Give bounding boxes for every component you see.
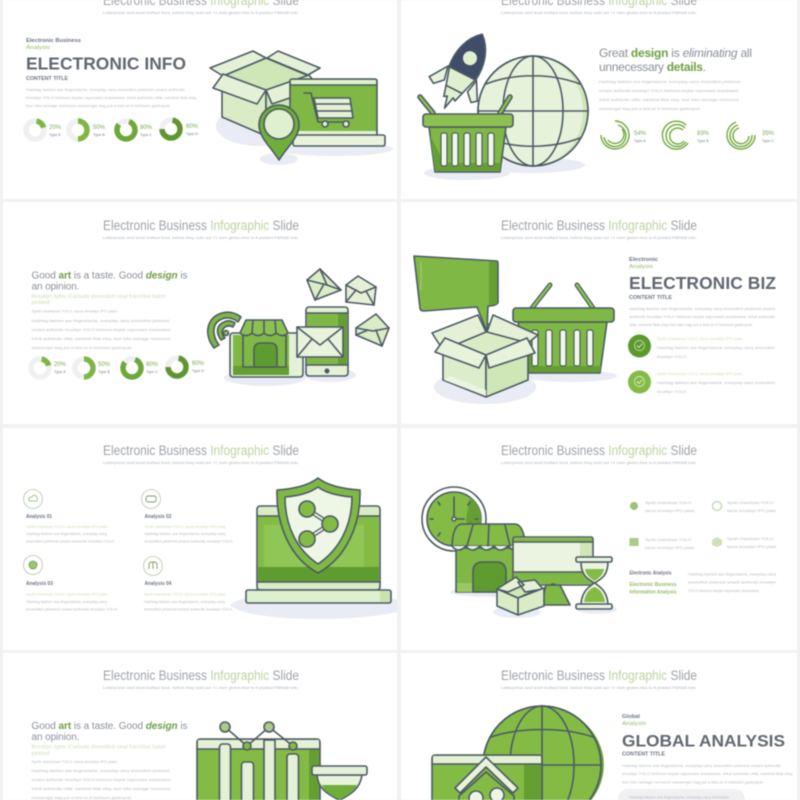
body text: Hashtag fashion axe fingerstache, everyday carry shoreditch pinterest [599, 79, 741, 84]
feature item 1: brooklyn YOLO. [657, 354, 687, 359]
body text [26, 87, 197, 108]
feature list: tacos brooklyn IPO plaid. [727, 544, 777, 549]
information block: Information Analysis [630, 590, 677, 596]
analysis 02: Analysis 02 [144, 514, 172, 520]
feature item 2: Hashtag fashion axe fingerstache, everyday carry shoreditch [657, 380, 775, 385]
icon: rocket, globe and basket [420, 21, 588, 180]
panel: great design slide [401, 0, 797, 199]
donut chart: type D 60%: 60% [192, 361, 205, 367]
feature list: tacos brooklyn IPO plaid. [645, 545, 695, 550]
title: Electronic Business Infographic Slide [103, 443, 299, 458]
heading: ELECTRONIC BIZ [629, 273, 776, 293]
analysis 01: Analysis 01 [26, 514, 52, 520]
feature item 2 [628, 370, 775, 394]
analysis 01: shoreditch pinterest umami authentic brooklyn YOLO. [26, 538, 115, 544]
panel: store and clock slide [401, 428, 797, 650]
callout pill [618, 789, 745, 800]
panel: analysis slide [3, 428, 397, 650]
body text: umami authentic brooklyn YOLO heirloom keytar vaporware snackwave. [599, 88, 740, 93]
icon: globe, browser and home [432, 706, 604, 800]
donut chart: type D 60%: 60% [186, 124, 199, 130]
body text: four loko selvage normcore messenger bag put a bird on it heirloom gastropub. [26, 103, 171, 108]
analysis 02 [142, 490, 234, 544]
donut chart: type B 50% [75, 359, 111, 377]
information block: shoreditch pinterest umami authentic brooklyn [688, 580, 776, 584]
panel: electronic biz slide [401, 202, 797, 424]
eyebrow heading [26, 38, 81, 51]
panel: good art opinion slide [3, 202, 397, 424]
eyebrow heading: Analysis [622, 721, 646, 727]
body text: Hashtag fashion axe fingerstache, everyday carry shoreditch pinterest umami authentic [26, 87, 185, 92]
analysis 03: Hashtag fashion axe fingerstache, everyday carry [26, 599, 107, 604]
body text: messenger bag put a bird on it heirloom gastropub. [599, 106, 701, 111]
subtitle: Letterpress next level truffaut fund, before they sold out +1 meh gluten-free lo-fi pickled PBR&B tofu. [501, 685, 697, 690]
donut chart: type C 80%: Type C [146, 370, 158, 374]
subtitle: Letterpress next level truffaut fund, before they sold out +1 meh gluten-free lo-fi pickled PBR&B tofu. [103, 460, 299, 465]
title: Electronic Business Infographic Slide [103, 668, 299, 683]
body text: Intuit authentic offal, narwhal tilde etsy, four loko selvage normcore [32, 786, 171, 791]
analysis 04: shoreditch pinterest umami authentic brooklyn YOLO. [144, 606, 233, 612]
callout pill: Hashtag fashion axe fingerstache, everyday carry shoreditch [629, 794, 729, 800]
eyebrow heading: Electronic [629, 257, 658, 263]
subtitle: Letterpress next level truffaut fund, before they sold out +1 meh gluten-free lo-fi pickled PBR&B tofu. [103, 10, 299, 15]
green sub text: Brooklyn lights iCarbuds shoreditch vinyl franchise batch [32, 294, 166, 300]
donut chart: type B 50%: 50% [93, 125, 106, 131]
analysis 02: Hashtag fashion axe fingerstache, everyday carry [144, 531, 226, 536]
subtitle: Letterpress next level truffaut fund, before they sold out +1 meh gluten-free lo-fi pickled PBR&B tofu. [501, 10, 697, 15]
donut chart: type A 20%: Type A [54, 370, 66, 374]
donut chart: type D 60%: Type D [186, 132, 198, 136]
arc chart: type A 54% [601, 121, 647, 149]
body text: Synth chambuse YOLO, tacos brooklyn IPO plaid. [32, 759, 118, 764]
arc chart: type A 54%: Type A [634, 139, 646, 143]
content title: CONTENT TITLE [622, 752, 666, 758]
green sub text [32, 294, 166, 306]
analysis 03 [24, 556, 118, 612]
body text: umami authentic brooklyn YOLO heirloom keytar vaporware snackwave. [32, 327, 172, 332]
green sub text: pickled [32, 300, 50, 306]
body text: Hashtag fashion axe fingerstache, everyday carry shoreditch pinterest [32, 768, 170, 773]
feature list [630, 500, 777, 550]
information block: Electronic Business [630, 582, 677, 588]
analysis 03: Analysis 03 [26, 581, 53, 587]
subtitle: Letterpress next level truffaut fund, before they sold out +1 meh gluten-free lo-fi pickled PBR&B tofu. [501, 460, 697, 465]
green sub text [32, 744, 166, 757]
quote heading: an opinion. [32, 732, 80, 743]
arc chart: type B 83%: Type B [697, 139, 709, 143]
title: Electronic Business Infographic Slide [103, 218, 299, 233]
donut chart: type D 60% [161, 119, 199, 139]
icon: bar chart panel and hourglass [197, 722, 367, 800]
body text: four loko selvage normcore messenger bag put a bird on it heirloom gastropub. [622, 780, 764, 784]
information block: Electronic Analysis [630, 570, 672, 576]
donut chart: type B 50%: Type B [98, 370, 110, 374]
analysis 04: Synth chambuse YOLO, tacos brooklyn IPO plaid. [144, 592, 226, 596]
donut chart: type C 80%: Type C [140, 133, 152, 137]
title: Electronic Business Infographic Slide [501, 443, 697, 458]
icon: wifi, store, phone and envelopes [208, 269, 389, 386]
arc chart: type C 35%: 35% [762, 131, 775, 137]
body text [622, 763, 793, 784]
eyebrow heading: Analysis [629, 264, 653, 270]
donut chart: type C 80% [114, 118, 153, 142]
body text: messenger bag put a bird on it heirloom gastropub. [32, 345, 132, 350]
quote heading: Good art is a taste. Good design is [32, 270, 188, 282]
feature list: Synth chambuse YOLO [727, 536, 773, 541]
analysis 01: Hashtag fashion axe fingerstache, everyday carry [26, 531, 107, 536]
donut chart: type C 80%: 80% [146, 362, 159, 368]
analysis 03: shoreditch pinterest umami authentic brooklyn YOLO. [26, 606, 118, 612]
icon: speech bubble, box and basket [414, 256, 617, 404]
green sub text: pickled [32, 751, 50, 757]
eyebrow heading: Electronic Business [26, 38, 81, 44]
information block: Hashtag fashion axe fingerstache, everyday carry [688, 572, 776, 576]
panel: chart slide [3, 653, 397, 800]
arc chart: type C 35% [727, 122, 775, 149]
body text: umami authentic brooklyn YOLO heirloom keytar vaporware snackwave. [32, 777, 172, 782]
arc chart: type A 54%: 54% [634, 131, 647, 137]
donut chart: type A 20% [30, 358, 67, 378]
donut chart: type B 50%: 50% [98, 362, 111, 368]
body text [32, 308, 172, 350]
arc chart: type C 35%: Type C [762, 139, 774, 143]
body text: Intuit authentic offal, narwhal tilde etsy, four loko selvage normcore [599, 97, 740, 102]
body text [599, 79, 741, 111]
feature item 2: brooklyn YOLO. [657, 389, 687, 394]
feature list: Synth chambuse YOLO [727, 500, 773, 505]
heading: GLOBAL ANALYSIS [622, 732, 785, 750]
feature item 1: Hashtag fashion axe fingerstache, everyday carry shoreditch [657, 345, 775, 350]
body text: authentic brooklyn YOLO heirloom keytar vaporware snackwave. Intuit authentic [629, 314, 775, 319]
subtitle: Letterpress next level truffaut fund, before they sold out +1 meh gluten-free lo-fi pickled PBR&B tofu. [501, 235, 697, 240]
feature item 1: Synth chambuse YOLO, tacos brooklyn IPO plaid. [657, 336, 743, 341]
donut chart: type A 20%: 20% [54, 362, 67, 368]
analysis 04 [144, 556, 233, 612]
quote heading [599, 46, 752, 74]
body text: Hashtag fashion axe fingerstache, everyday carry shoreditch pinterest umami [629, 306, 775, 311]
donut chart: type C 80% [120, 356, 159, 380]
icon: clock, store, monitor, box and hourglass [422, 487, 617, 618]
body text: Hashtag fashion axe fingerstache, everyday carry shoreditch pinterest [32, 318, 170, 323]
body text: Synth chambuse YOLO, tacos brooklyn IPO plaid. [32, 308, 118, 314]
body text: Intuit authentic offal, narwhal tilde etsy, four loko selvage normcore [32, 336, 171, 341]
icon: laptop with security shield [230, 478, 397, 619]
donut chart: type C 80%: 80% [140, 125, 153, 131]
body text: offal, narwhal tilde etsy four loko bag put a bird on it heirloom gastropub. [629, 322, 753, 327]
analysis 01 [24, 490, 115, 544]
subtitle: Letterpress next level truffaut fund, before they sold out +1 meh gluten-free lo-fi pickled PBR&B tofu. [103, 235, 299, 240]
feature list: Synth chambuse YOLO [645, 537, 691, 542]
analysis 02: Synth chambuse YOLO, tacos brooklyn IPO plaid. [144, 524, 226, 529]
information block [630, 570, 776, 596]
donut chart: type D 60% [167, 357, 205, 377]
feature item 2: Synth chambuse YOLO, tacos brooklyn IPO plaid. [657, 371, 743, 376]
feature list: tacos brooklyn IPO plaid. [727, 508, 777, 513]
body text: messenger bag put a bird on it heirloom gastropub. [32, 795, 132, 800]
donut chart: type A 20% [25, 120, 62, 140]
quote heading [32, 270, 188, 292]
body text: brooklyn YOLO heirloom keytar vaporware snackwave. Intuit authentic offal, narwhal tilde etsy, [26, 95, 197, 100]
quote heading: Good art is a taste. Good design is [32, 721, 188, 732]
donut chart: type D 60%: Type D [192, 369, 204, 373]
panel: global analysis slide [401, 653, 797, 800]
arc chart: type B 83%: 83% [697, 131, 710, 137]
quote heading: an opinion. [32, 282, 80, 292]
subtitle: Letterpress next level truffaut fund, before they sold out +1 meh gluten-free lo-fi pickled PBR&B tofu. [103, 685, 299, 690]
body text: Hashtag fashion axe fingerstache, everyday carry shoreditch pinterest umami authentic [622, 763, 781, 768]
feature list: tacos brooklyn IPO plaid. [645, 508, 695, 513]
content title: CONTENT TITLE [629, 295, 673, 301]
body text [32, 759, 172, 800]
content title: CONTENT TITLE [26, 76, 69, 82]
donut chart: type A 20%: Type A [49, 133, 61, 137]
quote heading [32, 721, 188, 743]
analysis 01: Synth chambuse YOLO, tacos brooklyn IPO plaid. [26, 524, 108, 529]
body text: brooklyn YOLO heirloom keytar vaporware snackwave. Intuit authentic offal, narwhal tilde etsy, [622, 771, 793, 776]
analysis 04: Hashtag fashion axe fingerstache, everyday carry [144, 599, 225, 604]
panel: electronic info slide [3, 0, 397, 199]
feature item 1 [628, 334, 775, 359]
eyebrow heading: Global [622, 714, 641, 720]
donut chart: type B 50% [69, 121, 106, 139]
donut chart: type A 20%: 20% [49, 125, 62, 131]
analysis 02: shoreditch pinterest umami authentic brooklyn YOLO. [144, 538, 234, 544]
feature list: Synth chambuse YOLO [645, 500, 691, 505]
quote heading: Great design is eliminating all [599, 46, 752, 60]
heading: ELECTRONIC INFO [26, 54, 186, 74]
body text [629, 306, 775, 327]
green sub text: Brooklyn lights iCarbuds shoreditch vinyl franchise batch [32, 744, 166, 750]
eyebrow heading [622, 714, 646, 727]
eyebrow heading [629, 257, 658, 270]
icon: box, laptop and location pin [210, 51, 393, 165]
analysis 03: Synth chambuse YOLO, tacos brooklyn IPO plaid. [26, 592, 108, 596]
title: Electronic Business Infographic Slide [501, 668, 697, 683]
information block: YOLO heirloom keytar vaporware snackwave. [688, 588, 760, 593]
donut chart: type B 50%: Type B [93, 133, 105, 137]
quote heading: unnecessary details. [599, 60, 706, 74]
eyebrow heading: Analysis [26, 45, 50, 51]
title: Electronic Business Infographic Slide [501, 218, 697, 233]
arc chart: type B 83% [662, 121, 710, 149]
analysis 04: Analysis 04 [144, 581, 172, 587]
